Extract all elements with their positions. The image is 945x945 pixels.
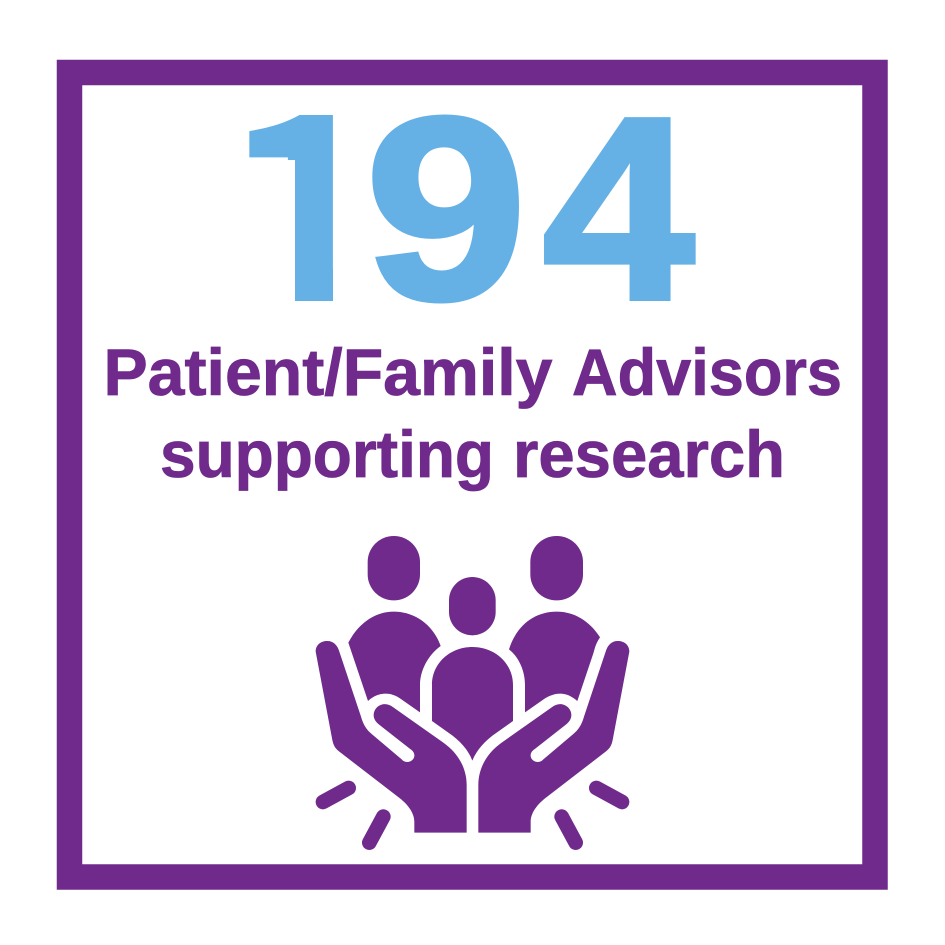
heading line 1	[104, 335, 842, 409]
icon: right hand	[478, 641, 629, 833]
big number: 194: 9	[365, 64, 527, 354]
icon: right person	[509, 536, 600, 712]
heading line 2	[160, 417, 785, 491]
heading line 2: supporting	[160, 417, 494, 491]
big number: 194: 1	[220, 5, 389, 376]
infographic canvas	[56, 60, 888, 890]
icon: centre person	[432, 577, 513, 761]
big number: 194	[249, 114, 696, 304]
icon: hands holding three people	[316, 536, 629, 843]
icon: left hand	[316, 641, 467, 833]
icon: left person	[348, 536, 441, 712]
big number: 194: 4	[542, 64, 696, 354]
icon: left sparkle rays	[323, 788, 383, 843]
heading line 2: research	[513, 417, 785, 491]
heading line 1: Patient/Family	[104, 335, 553, 409]
icon: right sparkle rays	[562, 788, 622, 843]
panel: purple square frame	[70, 72, 875, 877]
heading line 1: Advisors	[572, 335, 842, 409]
heading text: Patient/Family Advisors supporting research	[104, 335, 842, 491]
